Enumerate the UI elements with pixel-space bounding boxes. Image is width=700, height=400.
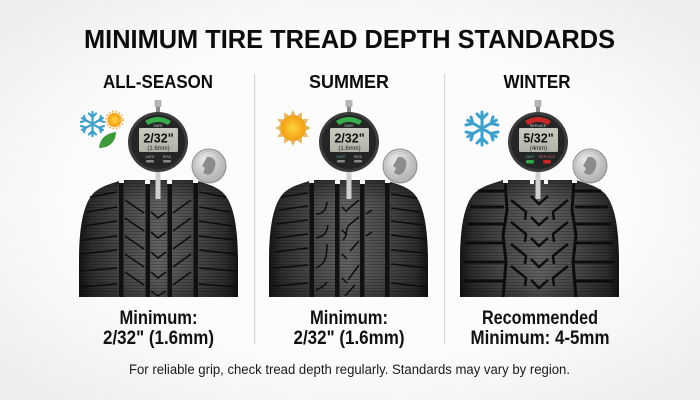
footer note: For reliable grip, check tread depth regularly. Standards may vary by region.	[129, 362, 570, 377]
minimum label	[103, 308, 214, 349]
minimum label: Minimum:	[310, 308, 388, 329]
minimum label	[294, 308, 404, 349]
title: MINIMUM TIRE TREAD DEPTH STANDARDS	[84, 24, 615, 54]
gauge: (1.6mm)	[147, 146, 170, 152]
gauge: REPLACE	[530, 124, 547, 128]
heading: summer: SUMMER	[309, 72, 389, 92]
gauge	[508, 100, 568, 199]
gauge: 2/32"	[143, 132, 174, 146]
minimum label: 2/32" (1.6mm)	[103, 328, 214, 349]
icon: sun	[275, 110, 311, 146]
icon: snowflake	[81, 112, 104, 136]
icon: sun	[106, 112, 123, 128]
recommended label: Minimum: 4-5mm	[470, 328, 610, 349]
gauge: SAFE	[344, 124, 354, 128]
gauge: SAFE	[336, 155, 346, 159]
gauge: (4mm)	[530, 146, 547, 152]
tire	[460, 179, 619, 297]
gauge: RISK	[354, 155, 363, 159]
gauge: (1.6mm)	[338, 146, 361, 152]
gauge	[128, 100, 188, 199]
coin: quarter	[192, 149, 226, 183]
minimum label: Minimum:	[120, 308, 198, 329]
icon: leaf	[99, 132, 116, 148]
panel: summer	[269, 72, 428, 349]
gauge: RISK	[163, 155, 172, 159]
tire	[79, 179, 238, 297]
gauge: REPLACE	[539, 155, 556, 159]
icon: snowflake	[466, 112, 498, 145]
gauge: 5/32"	[523, 132, 554, 146]
gauge: SAFE	[145, 155, 155, 159]
heading: winter: WINTER	[504, 72, 570, 92]
panel: all-season	[79, 72, 238, 349]
gauge	[319, 100, 379, 199]
recommended label	[470, 308, 610, 349]
coin: quarter	[573, 149, 607, 183]
gauge: 2/32"	[334, 132, 365, 146]
gauge: SAFE	[525, 155, 535, 159]
panel: winter	[460, 72, 619, 349]
coin: quarter	[383, 149, 417, 183]
recommended label: Recommended	[482, 308, 598, 329]
heading: all-season: ALL-SEASON	[103, 72, 213, 92]
gauge: SAFE	[153, 124, 163, 128]
minimum label: 2/32" (1.6mm)	[294, 328, 404, 349]
tire	[269, 179, 428, 297]
